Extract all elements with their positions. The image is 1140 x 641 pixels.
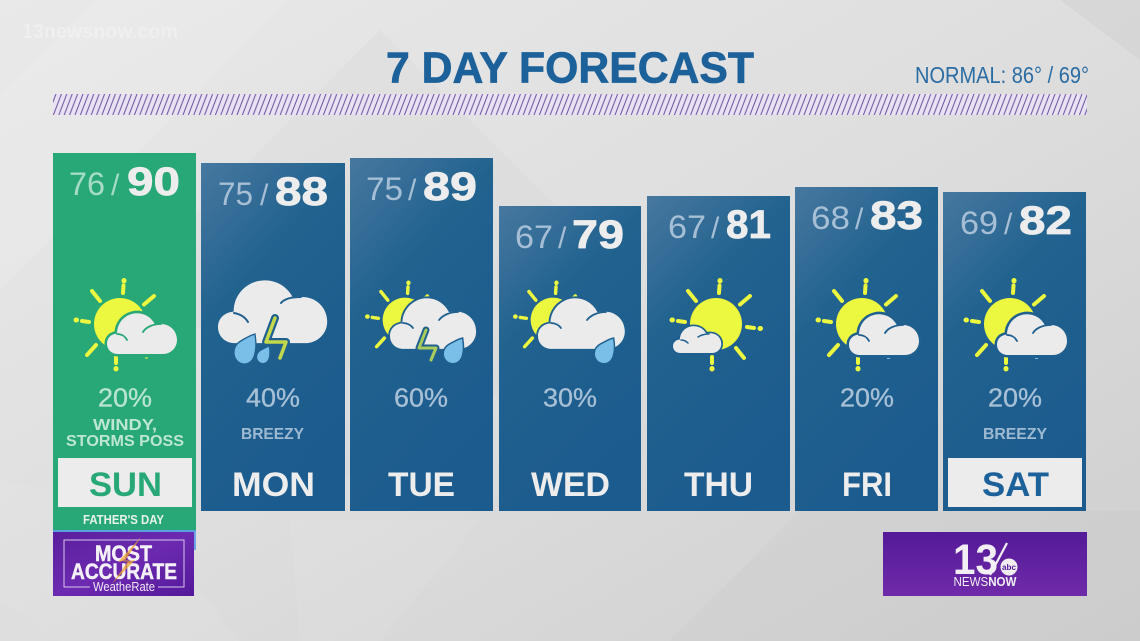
temperatures: Friday bbox=[811, 194, 923, 238]
badge: Most Accurate WeatheRate bbox=[53, 530, 196, 596]
icon: thunderstorm bbox=[218, 280, 327, 363]
temperatures: Monday bbox=[218, 170, 328, 214]
day label: SUN bbox=[89, 466, 162, 504]
icon: partly cloudy bbox=[966, 280, 1067, 369]
logo: 13 News Now: 13 bbox=[953, 536, 998, 584]
day label: TUE bbox=[388, 466, 455, 504]
badge: Most Accurate WeatheRate: MOST bbox=[95, 541, 152, 566]
day label: FRI bbox=[842, 466, 892, 504]
logo: 13 News Now bbox=[883, 532, 1087, 596]
temperatures: Friday: / bbox=[855, 203, 864, 236]
title: 7 DAY FORECAST bbox=[386, 44, 754, 92]
temperatures: Saturday: 69 bbox=[960, 205, 998, 241]
icon: partly cloudy bbox=[76, 280, 177, 369]
panel: Tuesday bbox=[350, 158, 493, 511]
temperatures: Sunday: 76 bbox=[69, 166, 105, 202]
temperatures: Saturday: 82 bbox=[1019, 199, 1072, 243]
temperatures: Thursday: 67 bbox=[668, 209, 706, 245]
temperatures: Thursday bbox=[668, 203, 771, 247]
panel: Thursday bbox=[647, 196, 790, 511]
conditions: BREEZY bbox=[241, 426, 304, 443]
temperatures: Sunday: 90 bbox=[127, 160, 180, 204]
precipitation chance: 20% bbox=[840, 384, 894, 412]
conditions: STORMS POSS bbox=[66, 433, 184, 450]
day label: MON bbox=[232, 466, 315, 504]
panel: Wednesday bbox=[499, 206, 641, 511]
icon: mostly sunny bbox=[672, 280, 760, 369]
temperatures: Tuesday: / bbox=[408, 174, 417, 207]
temperatures: Monday: 75 bbox=[218, 176, 253, 212]
day label: SAT bbox=[982, 466, 1049, 504]
conditions: WINDY, bbox=[93, 417, 157, 434]
day label bbox=[948, 458, 1082, 507]
hatched divider bbox=[53, 94, 1087, 115]
panel: Saturday bbox=[943, 192, 1086, 511]
precipitation chance: 40% bbox=[246, 384, 300, 412]
temperatures: Wednesday bbox=[515, 213, 624, 257]
temperatures: Tuesday: 89 bbox=[423, 165, 477, 209]
icon: sun, storm and rain bbox=[367, 283, 476, 363]
conditions: BREEZY bbox=[983, 426, 1047, 443]
precipitation chance: 30% bbox=[543, 384, 597, 412]
temperatures: Friday: 83 bbox=[870, 194, 923, 238]
panel: Friday bbox=[795, 187, 938, 511]
logo: 13 News Now: NEWSNOW bbox=[954, 575, 1017, 589]
badge: Most Accurate WeatheRate: WeatheRate bbox=[93, 580, 155, 594]
badge: Most Accurate WeatheRate: ACCURATE bbox=[71, 559, 177, 584]
day label bbox=[58, 458, 192, 507]
precipitation chance: 20% bbox=[988, 384, 1042, 412]
temperatures: Wednesday: / bbox=[558, 222, 567, 255]
logo: 13 News Now: abc bbox=[1002, 563, 1017, 572]
temperatures: Wednesday: 79 bbox=[572, 213, 624, 257]
temperatures: Wednesday: 67 bbox=[515, 219, 553, 255]
day label: THU bbox=[684, 466, 753, 504]
day label: WED bbox=[531, 466, 610, 504]
temperatures: Sunday bbox=[69, 160, 180, 204]
temperatures: Saturday bbox=[960, 199, 1072, 243]
icon: partly cloudy bbox=[818, 280, 919, 369]
holiday note: FATHER'S DAY bbox=[83, 513, 165, 527]
temperatures: Saturday: / bbox=[1004, 208, 1013, 241]
temperatures: Sunday: / bbox=[111, 169, 120, 202]
temperatures: Friday: 68 bbox=[811, 200, 850, 236]
temperatures: Thursday: / bbox=[711, 212, 720, 245]
temperatures: Tuesday bbox=[366, 165, 477, 209]
conditions bbox=[66, 417, 184, 450]
temperatures: Monday: / bbox=[260, 179, 269, 212]
temperatures: Tuesday: 75 bbox=[366, 171, 403, 207]
precipitation chance: 20% bbox=[98, 384, 152, 412]
panel: Sunday bbox=[53, 153, 196, 530]
watermark: 13newsnow.com bbox=[22, 21, 178, 43]
normal temperatures: NORMAL: 86° / 69° bbox=[915, 62, 1089, 88]
temperatures: Monday: 88 bbox=[275, 170, 328, 214]
icon: sun, cloud and rain bbox=[515, 283, 625, 363]
panel: Monday bbox=[201, 163, 345, 511]
precipitation chance: 60% bbox=[394, 384, 448, 412]
temperatures: Thursday: 81 bbox=[726, 203, 771, 247]
